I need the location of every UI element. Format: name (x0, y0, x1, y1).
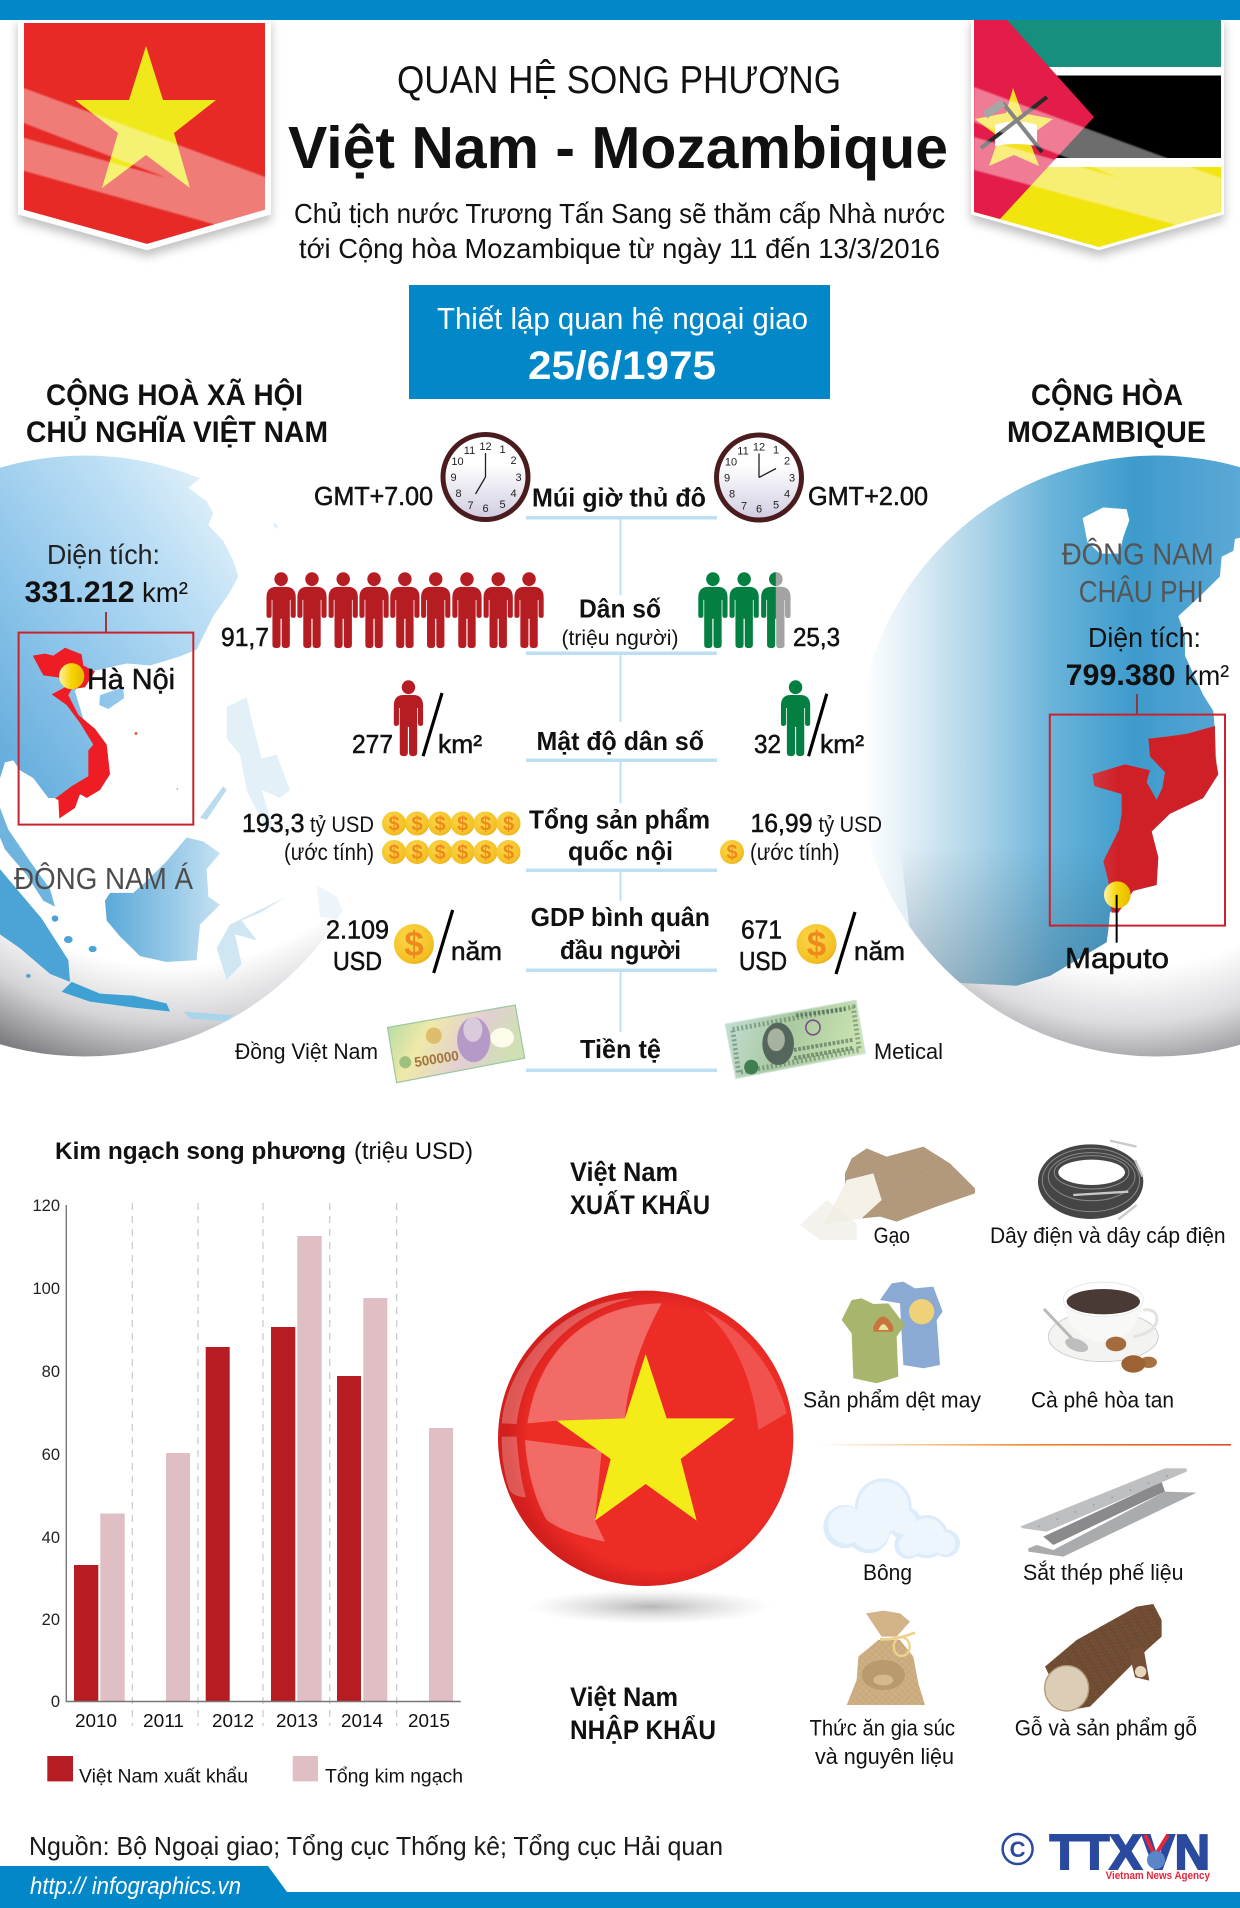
icon: red people (266, 572, 544, 648)
icon: coin Mozambique (720, 840, 744, 864)
heading: Vietnam: CHỦ NGHĨA VIỆT NAM (26, 415, 328, 449)
icon: clock right: 2 (784, 456, 790, 468)
Mozambique region text: 799.380 (1066, 659, 1176, 692)
comparison spine (526, 516, 717, 1072)
logo: TTXVN: Vietnam News Agency (1106, 1870, 1211, 1882)
Mozambique region text: CHÂU PHI (1079, 574, 1204, 609)
export item: cable: Dây điện và dây cáp điện (990, 1223, 1226, 1248)
import item: scrap steel: Sắt thép phế liệu (1023, 1560, 1184, 1585)
icon: green people (698, 572, 790, 648)
row: currency: Metical (874, 1039, 943, 1064)
icon: clock left: 3 (515, 472, 522, 484)
Mozambique region text: km² (1185, 660, 1229, 691)
icon: clock left: 10 (451, 456, 464, 468)
row: GDP per capita (326, 902, 905, 976)
import item: timber (1015, 1604, 1197, 1741)
icon: clock right: 8 (729, 488, 735, 500)
export item: rice (800, 1147, 975, 1248)
row: GDP: quốc nội (568, 836, 673, 866)
export item: rice: Gạo (874, 1223, 910, 1248)
icon: clock left: 12 (479, 441, 492, 453)
heading: exports (570, 1157, 710, 1220)
icon: clock left: 11 (464, 445, 475, 457)
map: Mozambique (1050, 694, 1225, 975)
bar chart: 100 (32, 1280, 60, 1298)
row: GDP: tỷ USD (818, 812, 882, 837)
source: Nguồn: Bộ Ngoại giao; Tổng cục Thống kê; Tổng cục Hải quan (29, 1831, 723, 1861)
icon: coins Vietnam: $ (411, 842, 423, 864)
icon: coins Vietnam: $ (480, 842, 491, 864)
logo: TTXVN: C (1010, 1837, 1026, 1862)
row: currency: Đồng Việt Nam (235, 1039, 378, 1064)
Vietnam area text: 331.212 (24, 576, 134, 609)
row: currency (235, 1000, 943, 1083)
date callout (409, 285, 830, 399)
icon: clock left: 8 (455, 488, 462, 500)
heading: Vietnam: CỘNG HOÀ XÃ HỘI (46, 378, 303, 412)
icon: clock right: 7 (741, 500, 747, 512)
row: GDP: 16,99 (750, 808, 812, 838)
icon: big coin left: $ (404, 925, 424, 964)
icon: clock right: 3 (789, 472, 795, 484)
bar chart: 2012 (212, 1711, 254, 1731)
Vietnam area text: km² (142, 577, 188, 608)
icon: clock right: 12 (753, 442, 765, 454)
icon: clock left: 7 (467, 500, 474, 512)
import item: cotton: Bông (863, 1560, 912, 1585)
export item: coffee (1031, 1282, 1174, 1412)
chart title: Kim ngạch song phương (55, 1138, 346, 1165)
bar chart: 2011 (143, 1711, 184, 1731)
import item: timber: Gỗ và sản phẩm gỗ (1015, 1716, 1197, 1741)
row: GDP per capita: 2.109 (326, 915, 389, 945)
title: main: Việt Nam - Mozambique (288, 115, 948, 181)
title block (288, 59, 948, 264)
row: GDP per capita: USD (739, 946, 787, 976)
icon: banknote VND (387, 1005, 525, 1083)
row: GDP per capita: năm (451, 936, 502, 966)
icon: red person (394, 680, 442, 756)
heading: imports (570, 1682, 716, 1745)
bar chart: 20 (42, 1611, 60, 1629)
heading: Vietnam (26, 378, 328, 449)
icon: coins Vietnam: $ (480, 814, 491, 836)
icon: green person (781, 680, 827, 756)
bar chart: 2014 (341, 1711, 383, 1731)
row: density: km² (820, 729, 864, 759)
flag star (75, 46, 216, 188)
icon: banknote VND: 500000 (413, 1048, 460, 1070)
chart legend: Tổng kim ngạch (325, 1766, 463, 1787)
row: GDP: tỷ USD (310, 812, 374, 837)
map: Mozambique: Maputo (1065, 943, 1169, 975)
import item: cotton (823, 1478, 960, 1585)
row: population: (triệu người) (562, 627, 678, 650)
icon: clock right: 9 (724, 472, 730, 484)
bar chart: 2010 (75, 1711, 117, 1731)
icon: clock right (716, 435, 802, 520)
icon: clock right: 5 (773, 500, 779, 512)
row: density: 32 (754, 729, 781, 759)
flag: Vietnam ribbon (21, 20, 268, 250)
import item: scrap steel (1020, 1468, 1197, 1585)
icon: coins Vietnam: $ (457, 842, 468, 864)
row: GDP: (ước tính) (284, 839, 374, 865)
icon: clock left (443, 434, 528, 520)
row: density: km² (438, 729, 482, 759)
icon: big coin right (796, 924, 836, 964)
icon: clock left: 5 (499, 499, 506, 511)
row: time zone: GMT+2.00 (808, 481, 928, 511)
bar chart (32, 1197, 461, 1731)
bar chart: 60 (42, 1446, 60, 1464)
date callout: Thiết lập quan hệ ngoại giao (437, 301, 808, 336)
row: GDP (242, 804, 882, 866)
top bar (0, 0, 1240, 20)
map: Vietnam: Hà Nội (87, 664, 175, 696)
row: GDP per capita: USD (333, 946, 382, 976)
chart title (55, 1138, 473, 1165)
icon: coins Vietnam: $ (457, 814, 468, 836)
export item: cable (990, 1141, 1226, 1248)
icon: clock right: 4 (784, 488, 790, 500)
row: GDP: 193,3 (242, 808, 304, 838)
footer bar (0, 1866, 1240, 1908)
bar chart: 80 (42, 1363, 60, 1381)
icon: coins Vietnam: $ (434, 814, 446, 836)
icon: clock right: 1 (773, 444, 779, 456)
icon: coins Vietnam: $ (388, 814, 400, 836)
chart title: (triệu USD) (354, 1138, 473, 1165)
row: population: 91,7 (221, 622, 269, 652)
Vietnam area text (24, 539, 188, 609)
heading: imports: NHẬP KHẨU (570, 1714, 716, 1745)
logo: TTXVN: TTXVN (1050, 1826, 1210, 1880)
bar chart: 40 (42, 1529, 60, 1547)
row: GDP per capita: 671 (741, 915, 782, 945)
export item: garments (803, 1282, 981, 1412)
bar chart: 2015 (408, 1711, 450, 1731)
Mozambique region text (1062, 536, 1229, 692)
icon: clock left: 6 (482, 503, 489, 515)
region label: Southeast Asia: ĐÔNG NAM Á (14, 861, 193, 896)
export item: garments: Sản phẩm dệt may (803, 1388, 981, 1412)
row: density: 277 (352, 729, 393, 759)
heading: exports: XUẤT KHẨU (570, 1189, 710, 1220)
row: population: Dân số (579, 594, 661, 624)
bar chart: 120 (32, 1197, 60, 1215)
chart legend (47, 1756, 463, 1787)
icon: coins Vietnam: $ (388, 842, 400, 864)
icon: banknote Metical (725, 1000, 865, 1079)
row: GDP: Tổng sản phẩm (529, 804, 710, 834)
heading: imports: Việt Nam (570, 1682, 678, 1712)
icon: clock right: 10 (725, 456, 737, 468)
row: population (221, 572, 840, 652)
import item: feed: và nguyên liệu (815, 1744, 954, 1769)
icon: clock left: 1 (499, 444, 506, 456)
icon: coins Vietnam: $ (503, 842, 514, 864)
row: currency: Tiền tệ (580, 1034, 661, 1064)
subtitle line 2: tới Cộng hòa Mozambique từ ngày 11 đến 13/3/2016 (299, 233, 940, 264)
icon: Vietnam flag sphere (498, 1291, 793, 1624)
icon: clock right: 6 (756, 504, 762, 516)
icon: clock left: 9 (450, 472, 457, 484)
chart legend: Việt Nam xuất khẩu (79, 1766, 248, 1787)
row: time zone (314, 434, 928, 520)
import item: feed: Thức ăn gia súc (810, 1716, 955, 1741)
icon: coins Vietnam: $ (411, 814, 423, 836)
emblem: star, rifle and book (975, 88, 1053, 166)
icon: clock left: 4 (510, 488, 517, 500)
heading: Mozambique (1007, 378, 1206, 449)
divider (815, 1444, 1231, 1446)
icon: clock right: 11 (737, 446, 749, 458)
icon: coins Vietnam: $ (434, 842, 446, 864)
Mozambique region text: Diện tích: (1088, 622, 1201, 653)
row: time zone: GMT+7.00 (314, 481, 433, 511)
row: density (352, 680, 864, 759)
row: GDP per capita: đầu người (560, 935, 681, 965)
icon: coins Vietnam (382, 812, 520, 864)
Mozambique region text: ĐÔNG NAM (1062, 536, 1214, 572)
row: time zone: Múi giờ thủ đô (532, 482, 706, 512)
date callout: 25/6/1975 (528, 344, 716, 388)
bar chart: 0 (51, 1693, 60, 1711)
row: density: Mật độ dân số (536, 726, 704, 756)
row: population: 25,3 (793, 622, 840, 652)
import item: feed (810, 1611, 955, 1769)
title: overline: QUAN HỆ SONG PHƯƠNG (397, 59, 841, 102)
heading: exports: Việt Nam (570, 1157, 678, 1187)
row: GDP per capita: GDP bình quân (531, 902, 710, 932)
icon: big coin left (394, 924, 434, 964)
icon: coins Vietnam: $ (503, 814, 514, 836)
footer bar: http:// infographics.vn (30, 1873, 241, 1900)
icon: big coin right: $ (807, 925, 826, 964)
export item: coffee: Cà phê hòa tan (1031, 1388, 1174, 1412)
heading: Mozambique: CỘNG HÒA (1031, 378, 1183, 412)
heading: Mozambique: MOZAMBIQUE (1007, 416, 1206, 449)
row: GDP per capita: năm (854, 936, 905, 966)
icon: coin Mozambique: $ (726, 842, 738, 864)
Vietnam area text: Diện tích: (47, 539, 160, 570)
subtitle line 1: Chủ tịch nước Trương Tấn Sang sẽ thăm cấp Nhà nước (294, 198, 945, 229)
flag: Mozambique ribbon (974, 20, 1222, 257)
map: Vietnam (19, 612, 193, 825)
row: GDP: (ước tính) (750, 839, 840, 865)
globe: Southeast Africa region (871, 456, 1240, 1056)
bar chart: 2013 (276, 1711, 318, 1731)
globe: Vietnam region (0, 456, 342, 1056)
icon: clock left: 2 (510, 455, 517, 467)
